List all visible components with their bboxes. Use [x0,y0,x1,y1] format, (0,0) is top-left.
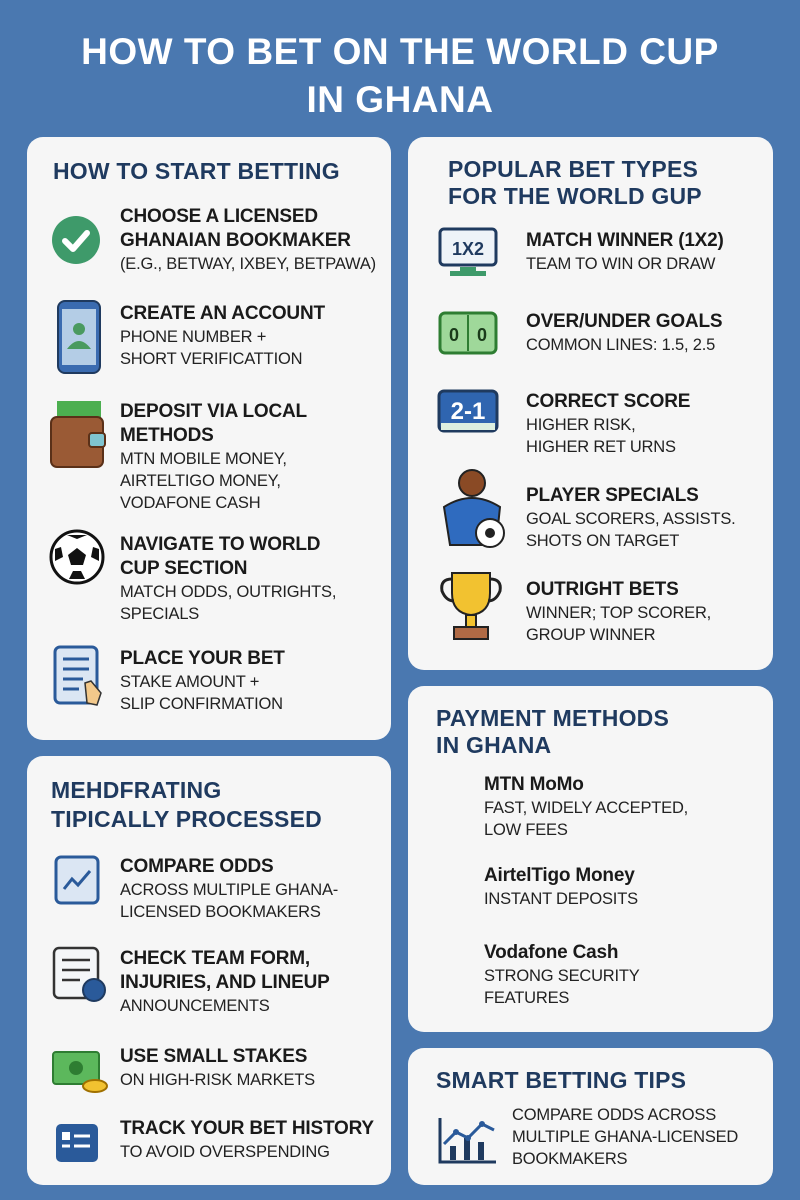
item: navigate: NAVIGATE TO WORLD [120,534,320,555]
item: deposit: AIRTELTIGO MONEY, [120,472,281,490]
item: outright: WINNER; TOP SCORER, [526,604,711,622]
item: mtn momo: MTN MoMo [484,774,584,795]
icon: 1x2 screen [438,228,498,276]
icon: money [52,1051,108,1093]
item: create account: CREATE AN ACCOUNT [120,303,325,324]
item: correct score: HIGHER RISK, [526,416,635,434]
icon: scoreboard 0-0 [438,312,498,354]
icon: bet slip [54,646,102,706]
item: small stakes [120,1046,315,1089]
heading [51,777,322,832]
icon: scoreboard 0-0: 0 [477,325,487,345]
item: vodafone: STRONG SECURITY [484,967,640,985]
item: vodafone: FEATURES [484,989,569,1007]
item: choose bookmaker: CHOOSE A LICENSED [120,206,318,227]
item: mtn momo [484,774,688,839]
item: outright: GROUP WINNER [526,626,655,644]
heading: TIPICALLY PROCESSED [51,806,322,832]
item: check team form: INJURIES, AND LINEUP [120,972,330,993]
item: deposit: MTN MOBILE MONEY, [120,450,287,468]
item: deposit: DEPOSIT VIA LOCAL [120,401,307,422]
icon: line chart [438,1118,496,1164]
item: choose bookmaker [120,206,376,273]
icon: phone [57,300,101,374]
item: navigate [120,534,336,623]
tip text: BOOKMAKERS [512,1150,627,1168]
item: airteltigo [484,865,638,908]
item: over/under [526,311,722,354]
icon: player [442,469,505,548]
item: match winner [526,230,724,273]
tip text: COMPARE ODDS ACROSS [512,1106,716,1124]
heading [436,705,669,758]
icon: football [50,530,104,584]
heading: HOW TO START BETTING [53,158,340,184]
item: correct score: CORRECT SCORE [526,391,690,412]
icon: scoreboard 2-1: 2-1 [451,398,485,425]
tip text [512,1106,738,1168]
item: compare odds [120,856,338,921]
item: track history [120,1118,374,1161]
item: track history: TO AVOID OVERSPENDING [120,1143,330,1161]
item: navigate: MATCH ODDS, OUTRIGHTS, [120,583,336,601]
icon: scoreboard 2-1 [438,390,498,432]
icon: document [52,946,106,1002]
item: match winner: TEAM TO WIN OR DRAW [526,255,715,273]
item: airteltigo: AirtelTigo Money [484,865,635,886]
item: compare odds: ACROSS MULTIPLE GHANA- [120,881,338,899]
item: navigate: SPECIALS [120,605,199,623]
item: navigate: CUP SECTION [120,558,247,579]
title [81,31,719,120]
item: outright [526,579,711,644]
item: correct score: HIGHER RET URNS [526,438,676,456]
item: create account: PHONE NUMBER + [120,328,266,346]
item: place bet: PLACE YOUR BET [120,648,285,669]
panel: method typically processed [27,756,391,1185]
item: over/under: OVER/UNDER GOALS [526,311,722,332]
item: create account: SHORT VERIFICATTION [120,350,302,368]
item: deposit: METHODS [120,425,214,446]
icon: scoreboard 0-0: 0 [449,325,459,345]
item: small stakes: ON HIGH-RISK MARKETS [120,1071,315,1089]
heading: SMART BETTING TIPS [436,1067,686,1093]
item: mtn momo: LOW FEES [484,821,568,839]
item: vodafone [484,942,640,1007]
item: player specials [526,485,736,550]
item: choose bookmaker: (E.G., BETWAY, IXBEY, BETPAWA) [120,255,376,273]
tip text: MULTIPLE GHANA-LICENSED [512,1128,738,1146]
panel: payment methods [408,686,773,1032]
item: airteltigo: INSTANT DEPOSITS [484,890,638,908]
panel: how to start betting [27,137,391,740]
heading [448,156,702,209]
item: compare odds: COMPARE ODDS [120,856,273,877]
panel: popular bet types [408,137,773,670]
icon: trophy [440,572,502,640]
icon: 1x2 screen: 1X2 [452,239,484,259]
heading: FOR THE WORLD GUP [448,183,702,209]
item: over/under: COMMON LINES: 1.5, 2.5 [526,336,715,354]
panel: smart betting tips [408,1048,773,1185]
item: player specials: PLAYER SPECIALS [526,485,699,506]
item: mtn momo: FAST, WIDELY ACCEPTED, [484,799,688,817]
heading: IN GHANA [436,732,551,758]
item: deposit: VODAFONE CASH [120,494,260,512]
item: choose bookmaker: GHANAIAN BOOKMAKER [120,230,351,251]
icon: history [56,1124,98,1162]
item: check team form: ANNOUNCEMENTS [120,997,270,1015]
item: correct score [526,391,690,456]
icon: chart [54,856,100,904]
item: check team form [120,948,330,1015]
icon: wallet [50,401,106,468]
title: HOW TO BET ON THE WORLD CUP [81,31,719,72]
item: place bet: SLIP CONFIRMATION [120,695,283,713]
item: place bet: STAKE AMOUNT + [120,673,259,691]
item: deposit [120,401,307,512]
item: player specials: GOAL SCORERS, ASSISTS. [526,510,736,528]
item: create account [120,303,325,368]
item: match winner: MATCH WINNER (1X2) [526,230,724,251]
item: small stakes: USE SMALL STAKES [120,1046,307,1067]
item: place bet [120,648,285,713]
item: compare odds: LICENSED BOOKMAKERS [120,903,321,921]
item: check team form: CHECK TEAM FORM, [120,948,310,969]
heading: POPULAR BET TYPES [448,156,698,182]
title: IN GHANA [307,79,493,120]
heading: MEHDFRATING [51,777,221,803]
item: track history: TRACK YOUR BET HISTORY [120,1118,374,1139]
heading: PAYMENT METHODS [436,705,669,731]
item: player specials: SHOTS ON TARGET [526,532,679,550]
item: vodafone: Vodafone Cash [484,942,618,963]
item: outright: OUTRIGHT BETS [526,579,679,600]
icon: check [52,216,100,264]
